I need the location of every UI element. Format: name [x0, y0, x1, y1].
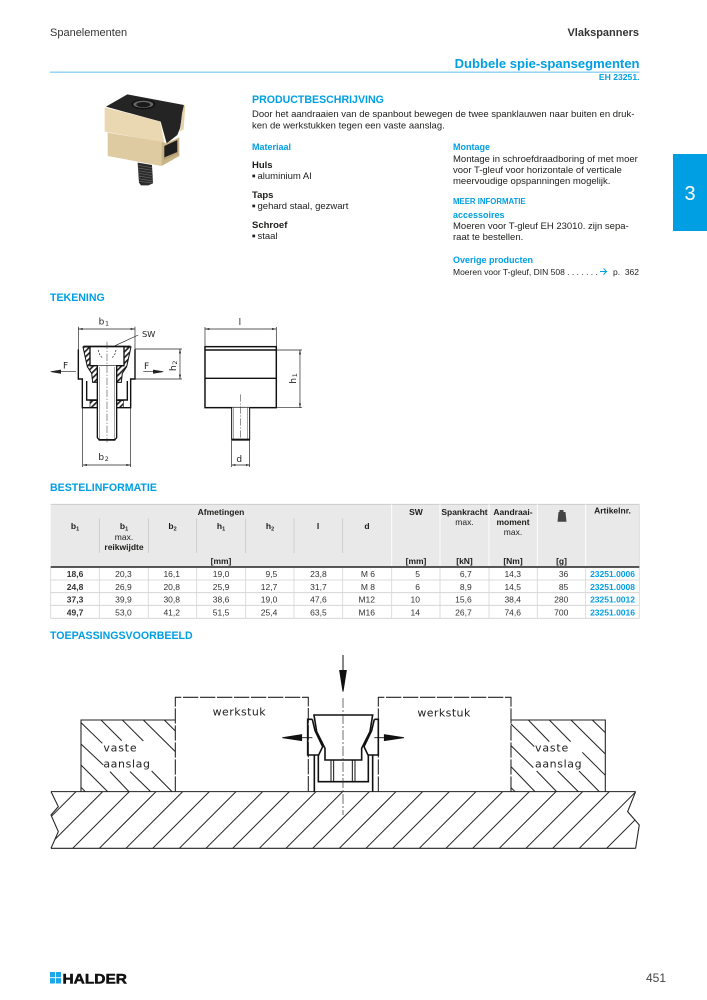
header labels: 2 [174, 526, 177, 532]
header labels: [kN] [456, 556, 473, 566]
row 18,6: 20,3 [115, 569, 132, 579]
row 18,6: 5 [415, 569, 420, 579]
arrow left [282, 735, 312, 741]
dimension b2 [83, 408, 131, 467]
other products reference: p. [613, 267, 620, 277]
header labels: reikwijdte [104, 542, 144, 552]
dimension b1: 1 [105, 320, 109, 327]
header labels: [Nm] [503, 556, 523, 566]
dimension b2: 2 [105, 456, 109, 463]
left workpiece: werkstuk [213, 706, 266, 719]
header labels: [mm] [406, 556, 427, 566]
black clamping jaw [106, 94, 184, 143]
table header background [51, 504, 639, 567]
header labels: moment [496, 517, 530, 527]
row 24,8: 8,9 [460, 582, 472, 592]
row 24,8: 20,8 [163, 582, 180, 592]
row 18,6: 23,8 [310, 569, 327, 579]
heading: application example: TOEPASSINGSVOORBEELD [50, 630, 193, 642]
side view [205, 318, 302, 467]
row 18,6: 16,1 [163, 569, 180, 579]
heading: PRODUCTBESCHRIJVING [252, 94, 384, 106]
right sliver [180, 105, 185, 132]
dimension h2: h [169, 365, 179, 371]
dimension l: l [239, 318, 241, 328]
row 37,3: M12 [358, 594, 375, 604]
row 37,3: 19,0 [261, 594, 278, 604]
title: Dubbele spie-spansegmenten [455, 56, 640, 71]
dimension b1: b [99, 317, 104, 327]
mounting text: meervoudige opspanningen mogelijk. [453, 176, 610, 187]
header labels: [g] [556, 556, 567, 566]
label: Materiaal [252, 142, 291, 152]
row 24,8 [67, 582, 635, 592]
product photo [105, 94, 185, 185]
header labels: Spankracht [441, 507, 488, 517]
table grid [51, 504, 639, 618]
header rule [50, 72, 640, 73]
force arrow left: F [63, 361, 68, 371]
centre line [239, 394, 241, 438]
row 18,6: 9,5 [265, 569, 278, 579]
row 24,8: M 8 [361, 582, 375, 592]
column: mounting and more information [453, 142, 639, 277]
row 18,6: 36 [559, 569, 569, 579]
hatched nut [90, 401, 123, 407]
row 37,3: 280 [554, 594, 569, 604]
header labels: [mm] [211, 556, 232, 566]
row 24,8: 85 [559, 582, 569, 592]
other products label: Overige producten [453, 255, 533, 265]
header labels: l [317, 521, 319, 531]
row 18,6: 18,6 [67, 569, 84, 579]
label: aanslag [103, 758, 150, 771]
material list: Schroef [252, 220, 288, 231]
centre line [342, 698, 344, 815]
row 49,7: 51,5 [213, 608, 230, 618]
row 49,7: 23251.0016 [590, 608, 635, 618]
wordmark: HALDER [62, 970, 127, 986]
row 18,6: 23251.0006 [590, 569, 635, 579]
accessories label: accessoires [453, 210, 505, 220]
row 37,3: 38,6 [213, 594, 230, 604]
label: aanslag [535, 758, 582, 771]
header labels: 2 [271, 526, 274, 532]
outer jaws and sleeve [308, 719, 378, 792]
label [535, 741, 582, 771]
header labels: b [120, 521, 125, 531]
material list: gehard staal, gezwart [258, 201, 349, 212]
row 37,3: 47,6 [310, 594, 327, 604]
header labels: h [266, 521, 271, 531]
dimension d [232, 440, 250, 467]
header labels: 1 [125, 526, 128, 532]
right workpiece [378, 697, 511, 792]
label SW [115, 329, 155, 346]
row 49,7 [67, 608, 635, 618]
application example drawing [19, 655, 639, 848]
row 37,3: 10 [411, 594, 420, 604]
row 49,7: 14 [411, 608, 420, 618]
row 49,7: M16 [358, 608, 375, 618]
nut threads [331, 760, 355, 782]
arrow right [374, 735, 404, 741]
other products reference: Moeren voor T-gleuf, DIN 508 . . . . . . . [453, 267, 598, 277]
row 37,3: 37,3 [67, 594, 84, 604]
article series code: EH 23251. [599, 72, 640, 82]
dimension d: d [236, 455, 242, 465]
left fixed stop [81, 720, 175, 792]
dimension h1: h [289, 378, 299, 384]
header labels: 1 [222, 526, 225, 532]
force arrow right [143, 362, 163, 373]
sleeve upper face [105, 107, 165, 143]
row 49,7: 49,7 [67, 608, 84, 618]
heading: order information: BESTELINFORMATIE [50, 482, 157, 494]
order table [51, 504, 639, 618]
row 37,3: 23251.0012 [590, 594, 635, 604]
bolt [97, 366, 117, 441]
row 24,8: 6 [415, 582, 420, 592]
sleeve lower face [108, 133, 161, 166]
label SW: SW [142, 329, 155, 339]
dimension b1 [78, 317, 135, 349]
row 49,7: 41,2 [163, 608, 180, 618]
dimension l [205, 318, 276, 347]
row 18,6: M 6 [361, 569, 375, 579]
header labels: max. [115, 532, 133, 542]
dimension h1: 1 [292, 373, 299, 377]
row 49,7: 53,0 [115, 608, 132, 618]
material list: Taps [252, 190, 273, 201]
dimension b2: b [98, 453, 104, 463]
row 37,3: 15,6 [455, 594, 472, 604]
header labels: max. [504, 527, 522, 537]
header labels: Aandraai- [493, 507, 533, 517]
row 49,7: 26,7 [455, 608, 472, 618]
material list: staal [258, 231, 278, 242]
icon: weight [558, 510, 566, 522]
material list [252, 160, 349, 242]
clamping segment [282, 715, 404, 792]
bolt [232, 408, 250, 441]
page number: 451 [646, 971, 666, 985]
row 37,3: 39,9 [115, 594, 132, 604]
row 49,7: 63,5 [310, 608, 327, 618]
header labels: Afmetingen [198, 507, 244, 517]
label: vaste [103, 741, 137, 754]
other products reference: 362 [625, 267, 639, 277]
mounting label: Montage [453, 142, 490, 152]
header labels: max. [455, 517, 474, 527]
chapter tab: 3 [684, 183, 696, 205]
housing outline [78, 349, 135, 408]
header labels: b [168, 521, 174, 531]
label: vaste [535, 741, 569, 754]
row 49,7: 700 [554, 608, 569, 618]
sleeve end with slot [161, 137, 179, 166]
hatched jaws [83, 347, 131, 382]
technical drawing [51, 317, 302, 467]
row 24,8: 12,7 [261, 582, 278, 592]
row 18,6: 14,3 [504, 569, 521, 579]
hatched base plate [19, 792, 639, 848]
row 24,8: 23251.0008 [590, 582, 635, 592]
chapter tab [673, 154, 707, 231]
section view [51, 317, 182, 467]
row 49,7: 25,4 [261, 608, 278, 618]
dimension h2 [135, 349, 182, 379]
description text: Door het aandraaien van de spanbout bewegen de twee spanklauwen naar buiten en druk- [252, 109, 634, 120]
HALDER logo [50, 970, 127, 986]
accessories text: Moeren voor T-gleuf EH 23010. zijn sepa- [453, 221, 629, 232]
body [205, 347, 276, 408]
material list: Huls [252, 160, 273, 171]
row 18,6 [67, 569, 635, 579]
column: materials [252, 142, 349, 242]
row 37,3: 38,4 [504, 594, 521, 604]
row 37,3: 30,8 [163, 594, 180, 604]
lower sleeve pocket [87, 381, 127, 400]
bolt head [314, 715, 373, 760]
row 24,8: 14,5 [504, 582, 521, 592]
centre line [106, 342, 108, 442]
icon: threaded bolt [138, 163, 153, 185]
right fixed stop [511, 720, 605, 792]
running header: section name: Spanelementen [50, 27, 127, 39]
left workpiece [175, 697, 308, 792]
force arrow left [51, 361, 76, 373]
row 18,6: 6,7 [460, 569, 472, 579]
right workpiece: werkstuk [417, 706, 471, 719]
row 18,6: 19,0 [213, 569, 230, 579]
row 24,8: 25,9 [213, 582, 230, 592]
section: product description [252, 94, 634, 132]
header labels: d [364, 521, 370, 531]
header labels: SW [409, 507, 424, 517]
dimension h2: 2 [172, 361, 179, 365]
material list: aluminium AI [258, 171, 312, 182]
inner pocket [318, 755, 368, 782]
accessories text: raat te bestellen. [453, 232, 523, 243]
header labels: 1 [76, 526, 79, 532]
header labels [71, 506, 631, 566]
header labels: h [217, 521, 222, 531]
header labels: b [71, 521, 76, 531]
logo mark [50, 972, 61, 984]
more info label: MEER INFORMATIE [453, 197, 526, 206]
row 24,8: 31,7 [310, 582, 327, 592]
row 24,8: 26,9 [115, 582, 132, 592]
dimension h1 [276, 350, 302, 408]
row 24,8: 24,8 [67, 582, 84, 592]
heading: drawing: TEKENING [50, 292, 105, 304]
row 37,3 [67, 594, 635, 604]
row 49,7: 74,6 [504, 608, 521, 618]
force arrow right: F [144, 362, 149, 372]
mounting text: voor T-gleuf voor horizontale of verticale [453, 165, 622, 176]
pressing arrow [340, 655, 346, 692]
socket hole [131, 99, 155, 109]
running header: category: Vlakspanners [567, 27, 639, 39]
description text: ken de werkstukken tegen een vaste aanslag. [252, 120, 445, 132]
label [103, 741, 150, 771]
header labels: Artikelnr. [594, 506, 631, 516]
socket head [90, 347, 124, 366]
mounting text: Montage in schroefdraadboring of met moer [453, 154, 638, 165]
